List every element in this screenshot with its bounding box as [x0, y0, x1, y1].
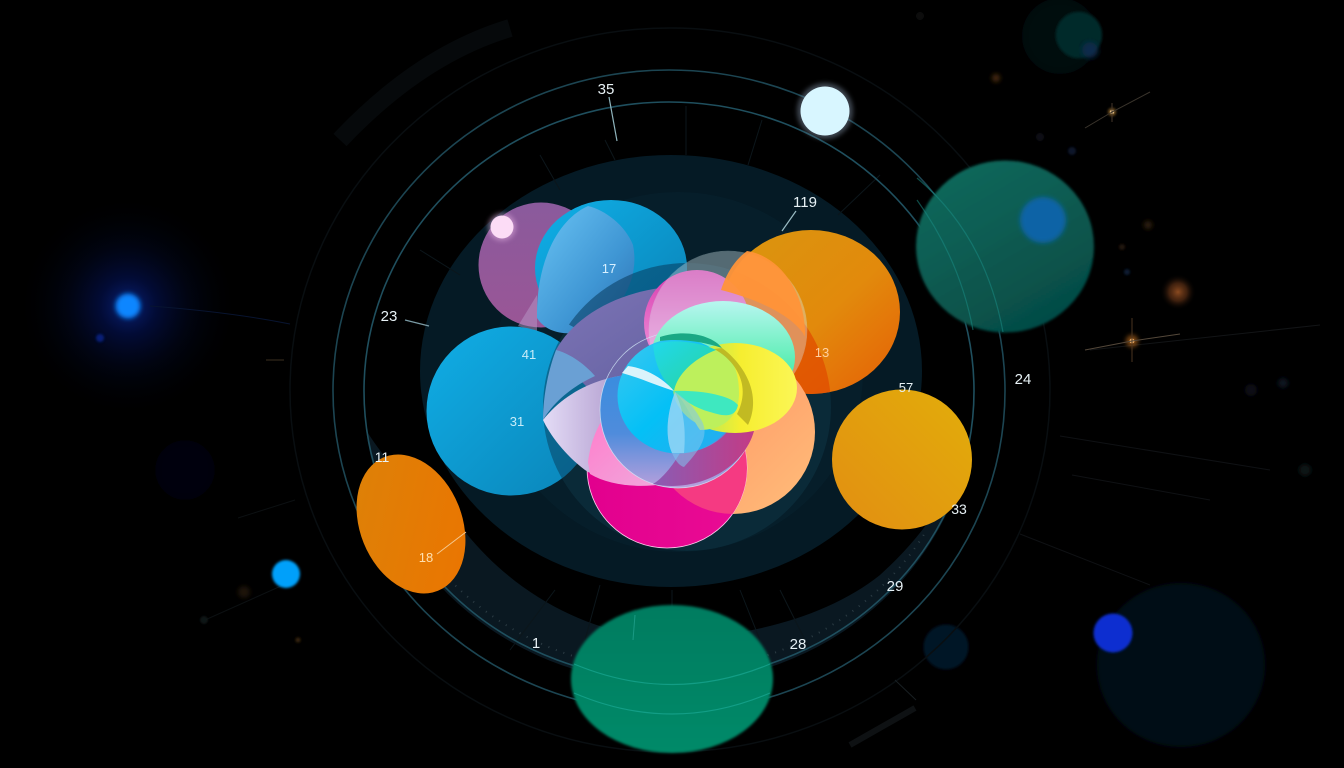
- bubble: pale pink upper: [644, 270, 750, 376]
- number labels: 35: [598, 81, 614, 98]
- icon: bright white star: [797, 83, 853, 139]
- number labels: 29: [887, 578, 903, 595]
- icon: large dim orb with blue dot, lower right: [1094, 583, 1265, 747]
- number labels: 18: [419, 550, 433, 565]
- bubble: magenta: [586, 450, 748, 548]
- number labels: 23: [381, 308, 397, 325]
- overlap: white swoosh: [622, 366, 674, 391]
- bubble: yellow lens: [673, 343, 797, 433]
- bubble: teal, upper right: [916, 160, 1094, 332]
- number labels: 11: [375, 449, 389, 465]
- icon: pink star: [488, 213, 516, 241]
- overlap: orange bright on veil: [721, 251, 805, 336]
- overlap: pink lower segment: [588, 420, 664, 486]
- icon: blurred blue star, left: [116, 294, 140, 318]
- bubble: cyan centre: [618, 338, 738, 454]
- overlap: blue patch on big blue bubble: [543, 350, 595, 420]
- bubble: orange upper right: [722, 230, 900, 394]
- central dark teal disc: [420, 155, 922, 587]
- bubble: green bottom: [571, 605, 773, 753]
- outer faint orbit and dark bands: [290, 28, 1050, 752]
- overlap: cyan-green wedge: [653, 341, 716, 391]
- number labels: 1: [532, 635, 540, 652]
- overlap: mint swirl: [674, 391, 738, 415]
- icon: dim navy orb, bottom: [924, 624, 968, 670]
- overlap: green top arc: [660, 333, 722, 348]
- bubble: orange left: [337, 438, 485, 610]
- bubble: blue middle: [600, 332, 756, 488]
- number labels: 17: [602, 261, 616, 276]
- number labels: 31: [510, 414, 524, 429]
- number labels: [375, 81, 1031, 653]
- number labels: 119: [793, 194, 817, 211]
- background: deep space glows: [16, 12, 1320, 642]
- overlap: magenta within blue middle: [653, 408, 756, 486]
- number labels: 33: [951, 501, 967, 517]
- number labels: 41: [522, 347, 536, 362]
- overlap: pale petals: [668, 392, 705, 467]
- number labels: 57: [899, 380, 913, 395]
- bubble: big blue left: [426, 326, 596, 496]
- radial spokes: [420, 106, 880, 650]
- number labels: 28: [790, 636, 806, 653]
- icon: lens flare stars, right: [1085, 92, 1196, 362]
- bubble: purple: [478, 202, 604, 328]
- overlap: lilac leaf: [543, 374, 680, 485]
- dark teal band, lower half of the dial: [366, 425, 972, 684]
- bubble: mint: [651, 301, 795, 413]
- number labels: 24: [1015, 371, 1031, 388]
- bubble: amber right: [832, 390, 972, 530]
- bubble: blue upper with lighter overlap: [518, 200, 687, 336]
- bubble: pale veil upper: [649, 251, 807, 409]
- icon: dim teal orb, top right: [1022, 0, 1102, 74]
- bubble: peach: [651, 350, 815, 514]
- number labels: 13: [815, 345, 829, 360]
- icon: blue dot, lower left: [272, 560, 300, 588]
- bubble: purple large lens: [556, 287, 745, 420]
- orbit rings: [333, 70, 1005, 712]
- overlay: disc tint over blue bubbles: [543, 263, 830, 478]
